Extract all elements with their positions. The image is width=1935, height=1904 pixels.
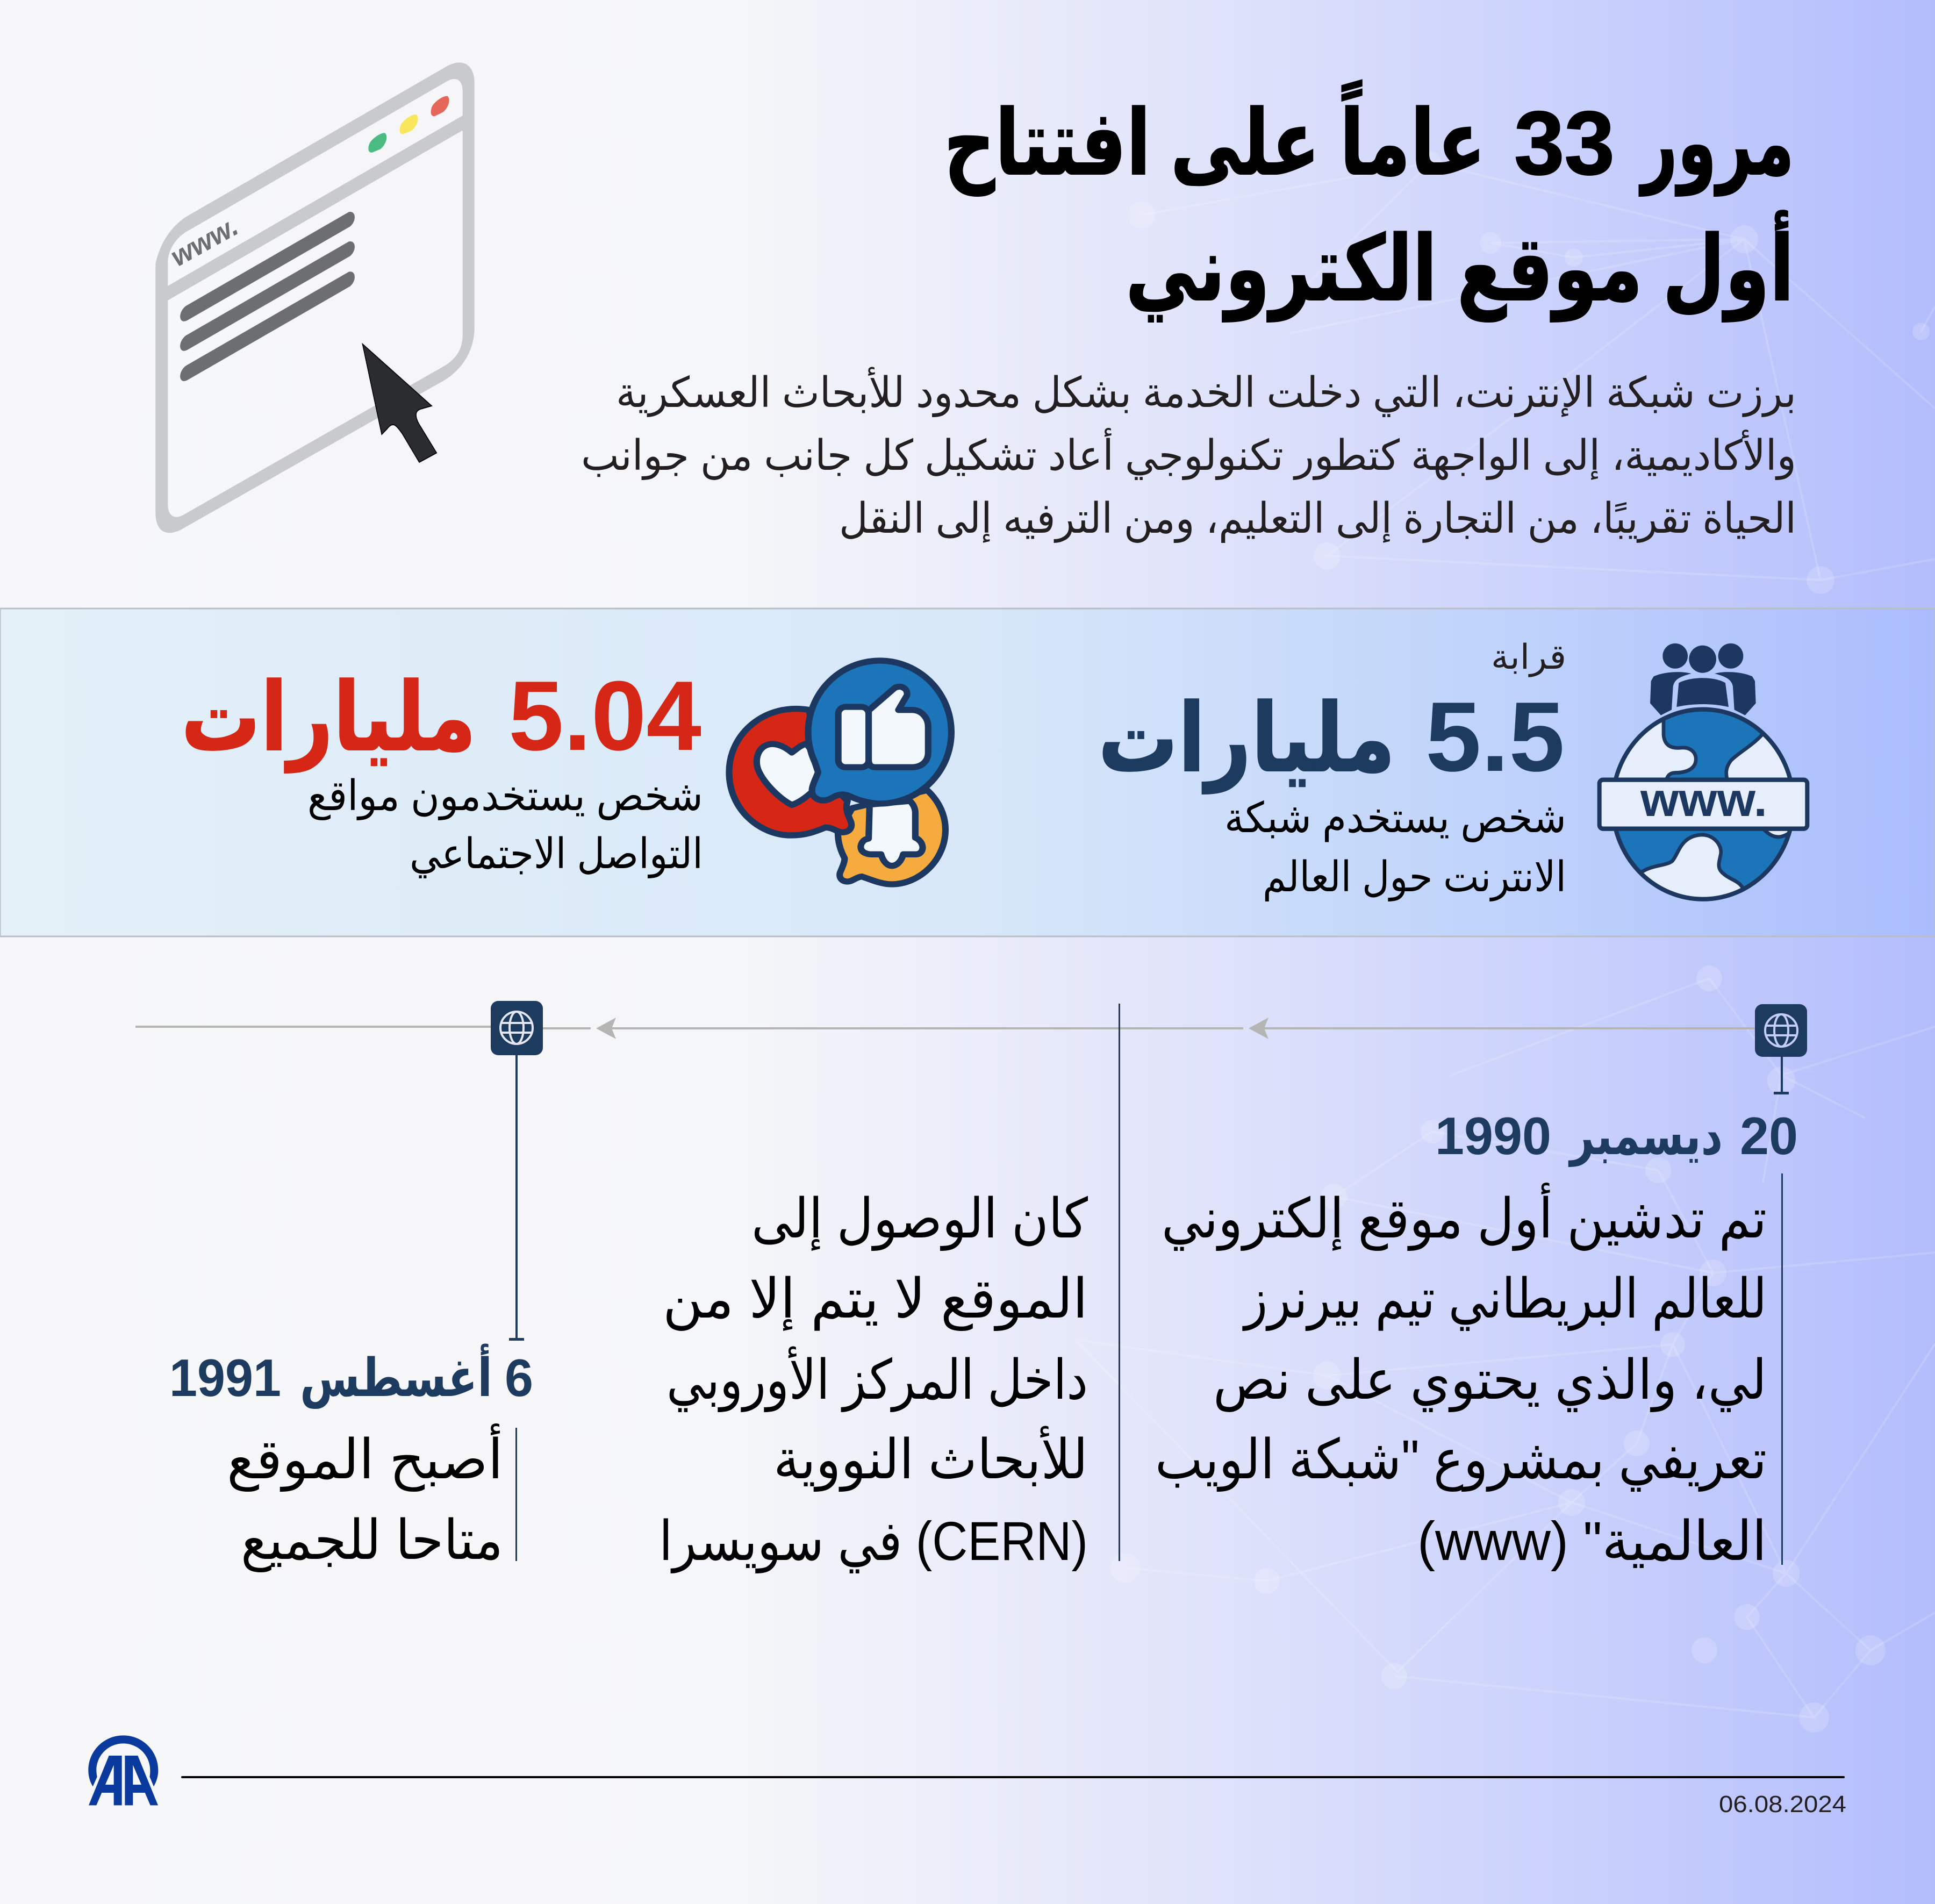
stat: 5.04 billion social media users: شخص يستخدمون مواقع	[307, 772, 703, 821]
timeline entry: 20 December 1990: لي، والذي يحتوي على نص	[1213, 1349, 1767, 1412]
footer rule	[181, 1776, 1845, 1778]
title: مرور	[1639, 92, 1794, 196]
timeline entry: 6 August 1991: متاحا للجميع	[241, 1509, 503, 1572]
panel: statistics band	[0, 609, 1935, 936]
timeline entry: CERN access	[659, 1188, 1088, 1573]
stat: 5.04 billion social media users: التواصل الاجتماعي	[410, 830, 703, 879]
timeline entry: CERN access: للأبحاث النووية	[773, 1426, 1088, 1492]
timeline entry: 6 August 1991: 1991	[169, 1348, 281, 1407]
intro text	[581, 367, 1796, 543]
divider: vertical middle	[1119, 1004, 1120, 1561]
timeline entry: 6 August 1991	[169, 1343, 533, 1572]
timeline entry: 20 December 1990: تعريفي بمشروع "شبكة الويب	[1155, 1429, 1767, 1492]
title: 33	[1514, 92, 1615, 194]
icon: browser window with cursor	[155, 62, 475, 533]
timeline entry: 6 August 1991: أغسطس	[300, 1343, 492, 1409]
stat: 5.5 billion internet users: قرابة	[1491, 638, 1566, 677]
timeline entry: 20 December 1990	[1155, 1106, 1798, 1572]
stat: 5.5 billion internet users: مليارات	[1098, 686, 1395, 794]
icon: globe with people: www.	[1640, 773, 1767, 826]
marker: 1991 globe	[491, 1001, 543, 1341]
timeline: axis with arrows	[135, 1018, 1755, 1039]
stat: 5.04 billion social media users	[181, 660, 703, 879]
logo: AA	[88, 1735, 158, 1805]
timeline entry: 20 December 1990: تم تدشين أول موقع إلكتروني	[1162, 1183, 1767, 1251]
stat: 5.5 billion internet users: الانترنت حول العالم	[1263, 853, 1566, 902]
timeline entry: CERN access: داخل المركز الأوروبي	[666, 1346, 1088, 1412]
timeline entry: 20 December 1990: 20	[1740, 1106, 1798, 1165]
timeline entry: 20 December 1990: للعالم البريطاني تيم بيرنرز	[1242, 1268, 1767, 1331]
timeline entry: 20 December 1990: 1990	[1435, 1106, 1551, 1165]
intro text: والأكاديمية، إلى الواجهة كتطور تكنولوجي أعاد تشكيل كل جانب من جوانب	[581, 428, 1796, 481]
date: 06.08.2024	[1719, 1791, 1846, 1817]
timeline entry: 6 August 1991: 6	[505, 1348, 533, 1407]
icon: social media bubbles	[729, 661, 951, 884]
stat: 5.04 billion social media users: 5.04	[508, 660, 701, 771]
stat: 5.5 billion internet users	[1098, 638, 1566, 902]
icon: browser window with cursor: www.	[166, 211, 243, 273]
timeline entry: 20 December 1990: العالمية" (www)	[1417, 1511, 1767, 1572]
intro text: الحياة تقريبًا، من التجارة إلى التعليم، ومن الترفيه إلى النقل	[839, 495, 1796, 543]
timeline entry: CERN access: كان الوصول إلى	[751, 1188, 1088, 1251]
timeline entry: 20 December 1990: ديسمبر	[1568, 1106, 1723, 1167]
timeline entry: CERN access: الموقع لا يتم إلا من	[663, 1268, 1088, 1331]
timeline entry: CERN access: (CERN) في سويسرا	[659, 1511, 1088, 1573]
marker: 1990 globe	[1755, 1004, 1807, 1094]
title	[944, 80, 1794, 322]
icon: globe with people	[1600, 643, 1807, 909]
stat: 5.04 billion social media users: مليارات	[181, 665, 476, 773]
timeline entry: 6 August 1991: أصبح الموقع	[227, 1423, 503, 1492]
stat: 5.5 billion internet users: 5.5	[1425, 681, 1565, 792]
intro text: برزت شبكة الإنترنت، التي دخلت الخدمة بشكل محدود للأبحاث العسكرية	[616, 367, 1796, 418]
title: عاماً على افتتاح	[944, 80, 1486, 196]
stat: 5.5 billion internet users: شخص يستخدم شبكة	[1224, 794, 1566, 842]
